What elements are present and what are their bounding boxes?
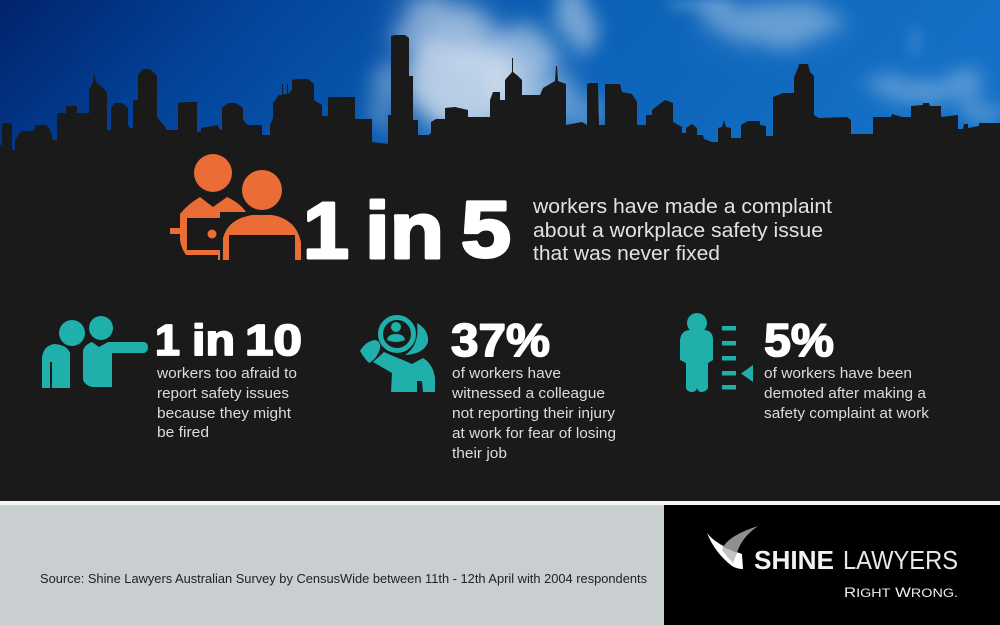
- text: 37% description: witnessed a colleague: [451, 385, 605, 402]
- text: source note: Source: Shine Lawyers Australian Survey by CensusWide between 11th - 12th April with 2004 respondents: [40, 571, 647, 586]
- heading: 5%: 5%: [764, 314, 834, 366]
- text: 37% description: at work for fear of losing: [452, 425, 616, 442]
- icon: two people, one pointing: [42, 316, 148, 391]
- heading: 1 in 5: 1: [303, 186, 349, 275]
- text: 1 in 10 description: [156, 365, 297, 441]
- text: 37% description: not reporting their injury: [452, 405, 616, 422]
- icon: person beside a level scale: [680, 313, 753, 392]
- text: main statement: about a workplace safety issue: [533, 219, 823, 242]
- city skyline silhouette and dark background: [0, 35, 1000, 501]
- stat panel: 37%: [360, 314, 616, 462]
- main stat: 1 in 5: [170, 154, 832, 275]
- text: 5% description: safety complaint at work: [764, 405, 930, 422]
- text: main statement: workers have made a complaint: [532, 195, 832, 218]
- text: SHINE LAWYERS wordmark: LAWYERS: [843, 545, 958, 575]
- heading: 37%: 37%: [451, 314, 550, 366]
- panel: Shine Lawyers logo: [664, 505, 1000, 625]
- text: 1 in 10 description: be fired: [157, 424, 209, 441]
- heading: 1 in 5: 5: [461, 184, 511, 274]
- heading: 1 in 10: 1: [155, 316, 180, 365]
- text: main statement: that was never fixed: [533, 242, 720, 265]
- sky background with clouds: [0, 0, 1000, 160]
- panel: source footer: [0, 505, 664, 625]
- text: Right Wrong tagline: RIGHT W RONG.: [844, 584, 958, 600]
- heading: 1 in 5: [303, 184, 511, 275]
- icon: logo tick mark: [707, 526, 758, 569]
- text: 5% description: of workers have been: [764, 365, 912, 382]
- text: 1 in 10 description: because they might: [157, 405, 292, 422]
- text: 5% description: demoted after making a: [764, 385, 927, 402]
- text: 5% description: [764, 365, 930, 422]
- footer divider: [0, 501, 1000, 505]
- icon: person with magnifying glass: [360, 318, 435, 392]
- text: 37% description: of workers have: [452, 365, 561, 382]
- text: main statement: [532, 195, 832, 265]
- text: 1 in 10 description: report safety issues: [157, 385, 289, 402]
- stat panel: 5%: [680, 313, 930, 422]
- heading: 1 in 10: 10: [245, 316, 302, 365]
- text: 37% description: their job: [452, 445, 507, 462]
- heading: 1 in 5: in: [365, 186, 444, 275]
- icon: two people at a laptop: [170, 154, 301, 260]
- stat panel: 1 in 10: [42, 316, 302, 441]
- text: SHINE LAWYERS wordmark: [754, 545, 958, 575]
- heading: 1 in 10: in: [192, 316, 235, 365]
- text: 1 in 10 description: workers too afraid to: [156, 365, 297, 382]
- heading: 1 in 10: [155, 316, 302, 365]
- text: 37% description: [451, 365, 616, 462]
- text: SHINE LAWYERS wordmark: SHINE: [754, 545, 834, 575]
